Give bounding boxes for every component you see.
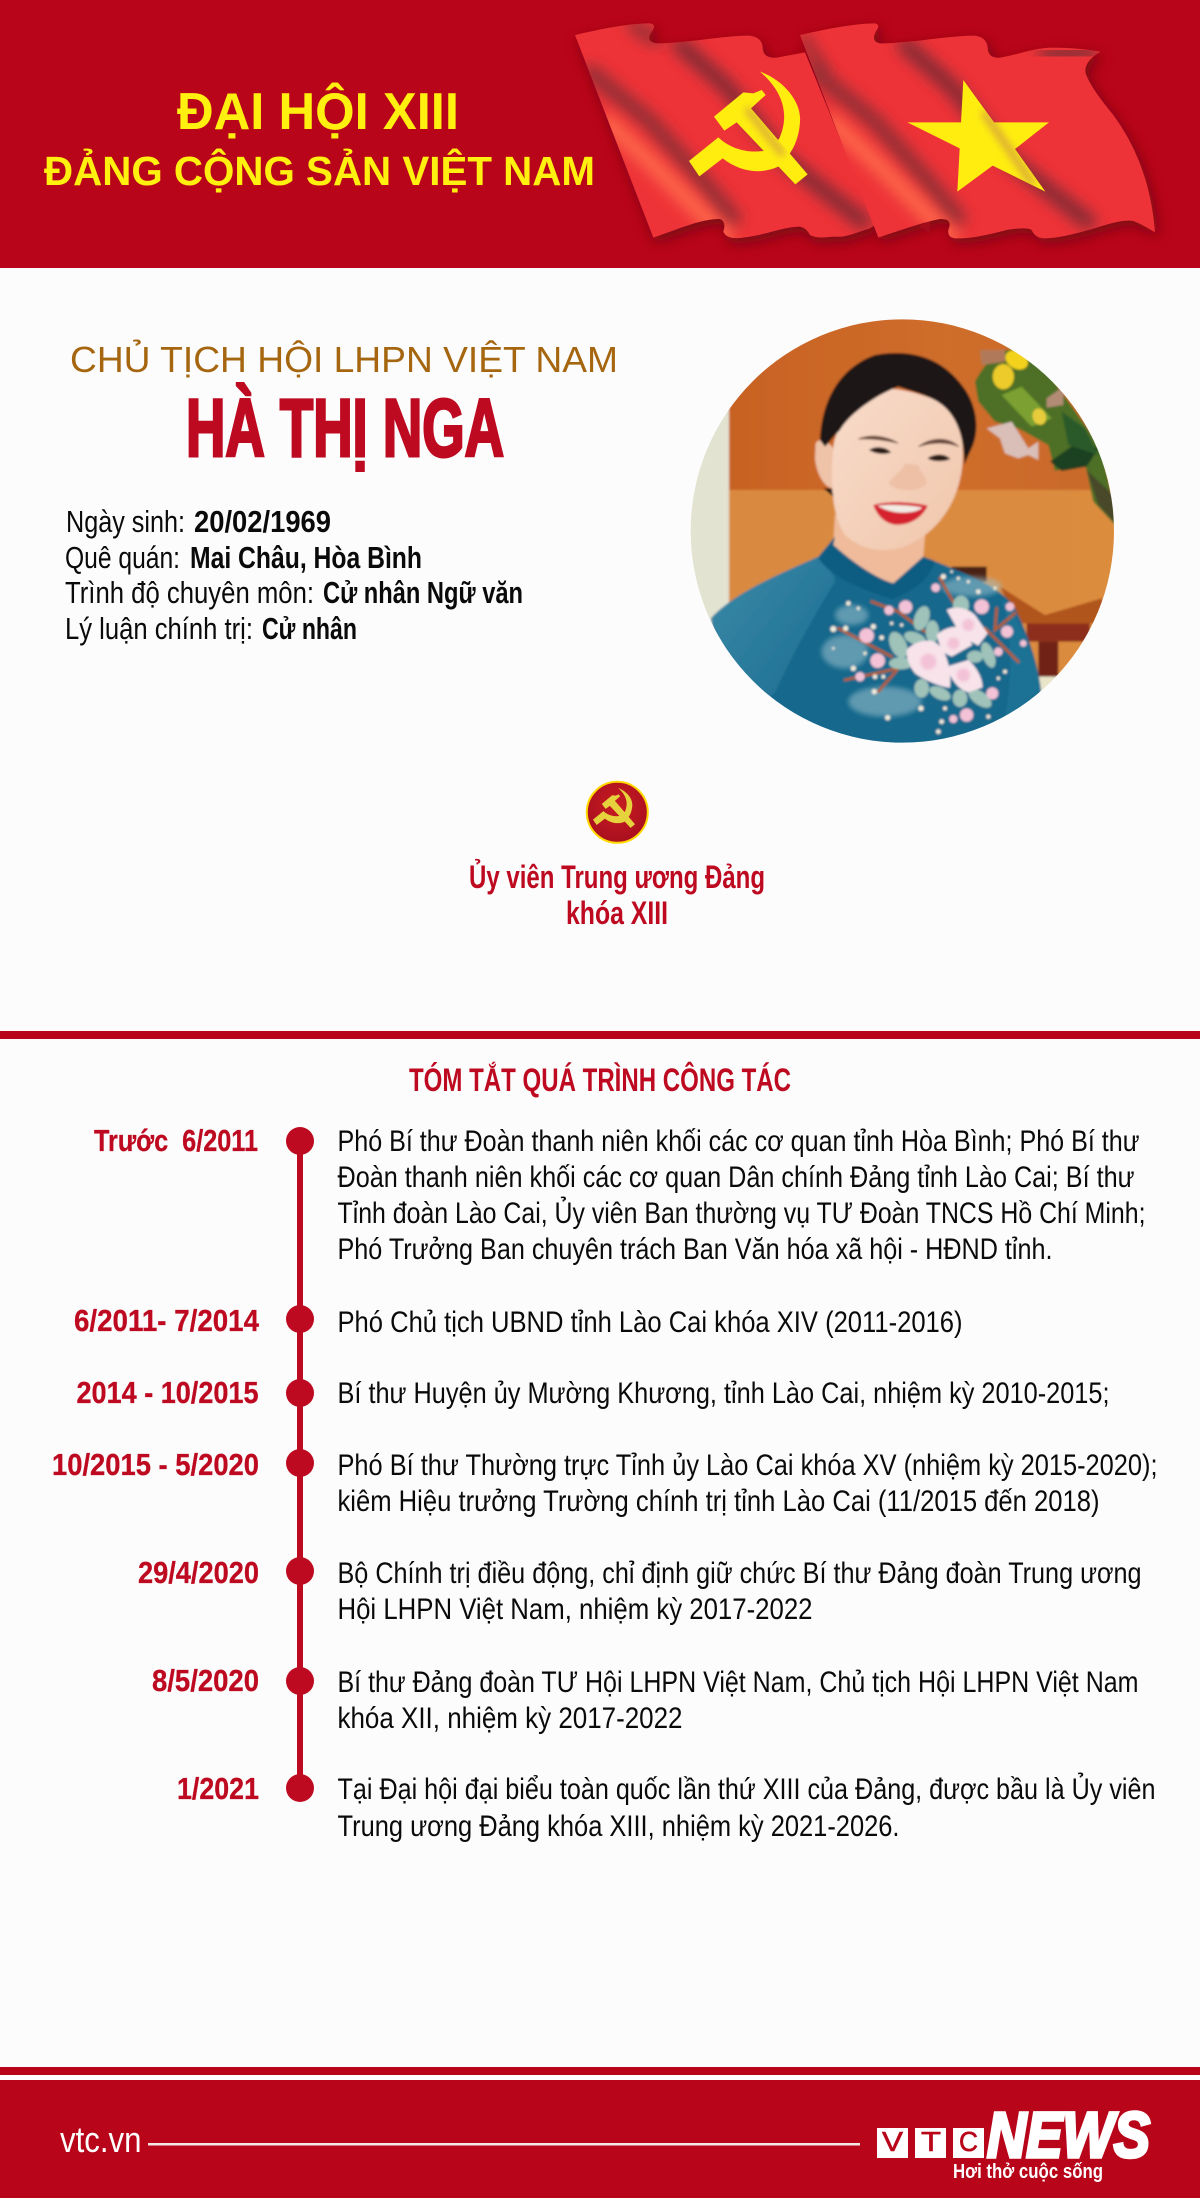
role heading: CHỦ TỊCH HỘI LHPN VIỆT NAM [70,338,618,380]
personal details [65,504,523,646]
hair [820,353,976,464]
entry: 1/2021 [177,1771,1156,1843]
title: ĐẢNG CỘNG SẢN VIỆT NAM [44,148,595,194]
entry: before 6/2011: Trước 6/2011 [94,1123,258,1158]
entry: 10/2015 - 5/2020: 10/2015 - 5/2020 [52,1447,259,1482]
plant [975,346,1118,528]
section heading: TÓM TẮT QUÁ TRÌNH CÔNG TÁC [409,1062,791,1098]
entry: 1/2021: Trung ương Đảng khóa XIII, nhiệm kỳ 2021-2026. [338,1810,900,1843]
facial features [858,436,898,443]
logo: VTC News: Hơi thở cuộc sống [953,2161,1103,2183]
neck [833,515,927,583]
section divider [0,1031,1200,1039]
portrait photo [690,319,1114,743]
central committee label [469,859,765,931]
timeline axis [297,1141,303,1788]
personal details: Quê quán: [65,540,180,575]
personal details: Lý luận chính trị: [65,611,253,646]
logo: VTC News: C [959,2126,978,2157]
career timeline [52,1123,1158,1843]
dress [711,537,1052,755]
personal details: Mai Châu, Hòa Bình [190,540,422,575]
flag: gold star [800,23,1155,238]
website: vtc.vn [60,2119,142,2160]
entry: 6/2011 - 7/2014: Phó Chủ tịch UBND tỉnh Lào Cai khóa XIV (2011-2016) [338,1306,962,1339]
entry: 2014 - 10/2015: 2014 - 10/2015 [76,1375,258,1410]
ear and face [815,440,833,488]
personal details: Cử nhân Ngữ văn [323,575,523,610]
personal details: Trình độ chuyên môn: [65,575,314,610]
entry: 8/5/2020: 8/5/2020 [152,1663,259,1698]
entry: before 6/2011 [94,1123,1146,1266]
embroidery [822,570,1027,734]
personal details: 20/02/1969 [194,504,331,539]
name heading: HÀ THỊ NGA [186,383,504,474]
entry: 1/2021: 1/2021 [177,1771,259,1806]
title: ĐẠI HỘI XIII [177,82,459,141]
flag shadows [578,28,1158,244]
flag: hammer and sickle [575,23,875,238]
entry: 29/4/2020: Hội LHPN Việt Nam, nhiệm kỳ 2017-2022 [338,1593,812,1626]
entry: 8/5/2020 [152,1663,1138,1735]
entry: before 6/2011: Phó Trưởng Ban chuyên trách Ban Văn hóa xã hội - HĐND tỉnh. [338,1233,1052,1266]
party emblem [587,782,648,843]
logo: VTC News: V [882,2126,903,2157]
logo: VTC News [877,2099,1150,2183]
entry: 2014 - 10/2015 [76,1375,1110,1410]
central committee label: khóa XIII [566,895,668,931]
title [44,82,595,194]
entry: 8/5/2020: khóa XII, nhiệm kỳ 2017-2022 [338,1702,682,1735]
personal details: Ngày sinh: [66,504,185,539]
collar [818,537,935,599]
entry: 29/4/2020 [138,1555,1142,1626]
logo: VTC News: T [921,2126,941,2157]
entry: 10/2015 - 5/2020 [52,1447,1158,1518]
footer [0,2067,1200,2198]
personal details: Cử nhân [262,611,357,646]
logo: VTC News: NEWS [987,2099,1150,2171]
entry: 6/2011 - 7/2014: 6/2011- 7/2014 [74,1303,260,1338]
header banner [0,0,1200,268]
entry: 6/2011 - 7/2014 [74,1303,962,1339]
entry: 29/4/2020: 29/4/2020 [138,1555,259,1590]
central committee label: Ủy viên Trung ương Đảng [469,859,765,895]
